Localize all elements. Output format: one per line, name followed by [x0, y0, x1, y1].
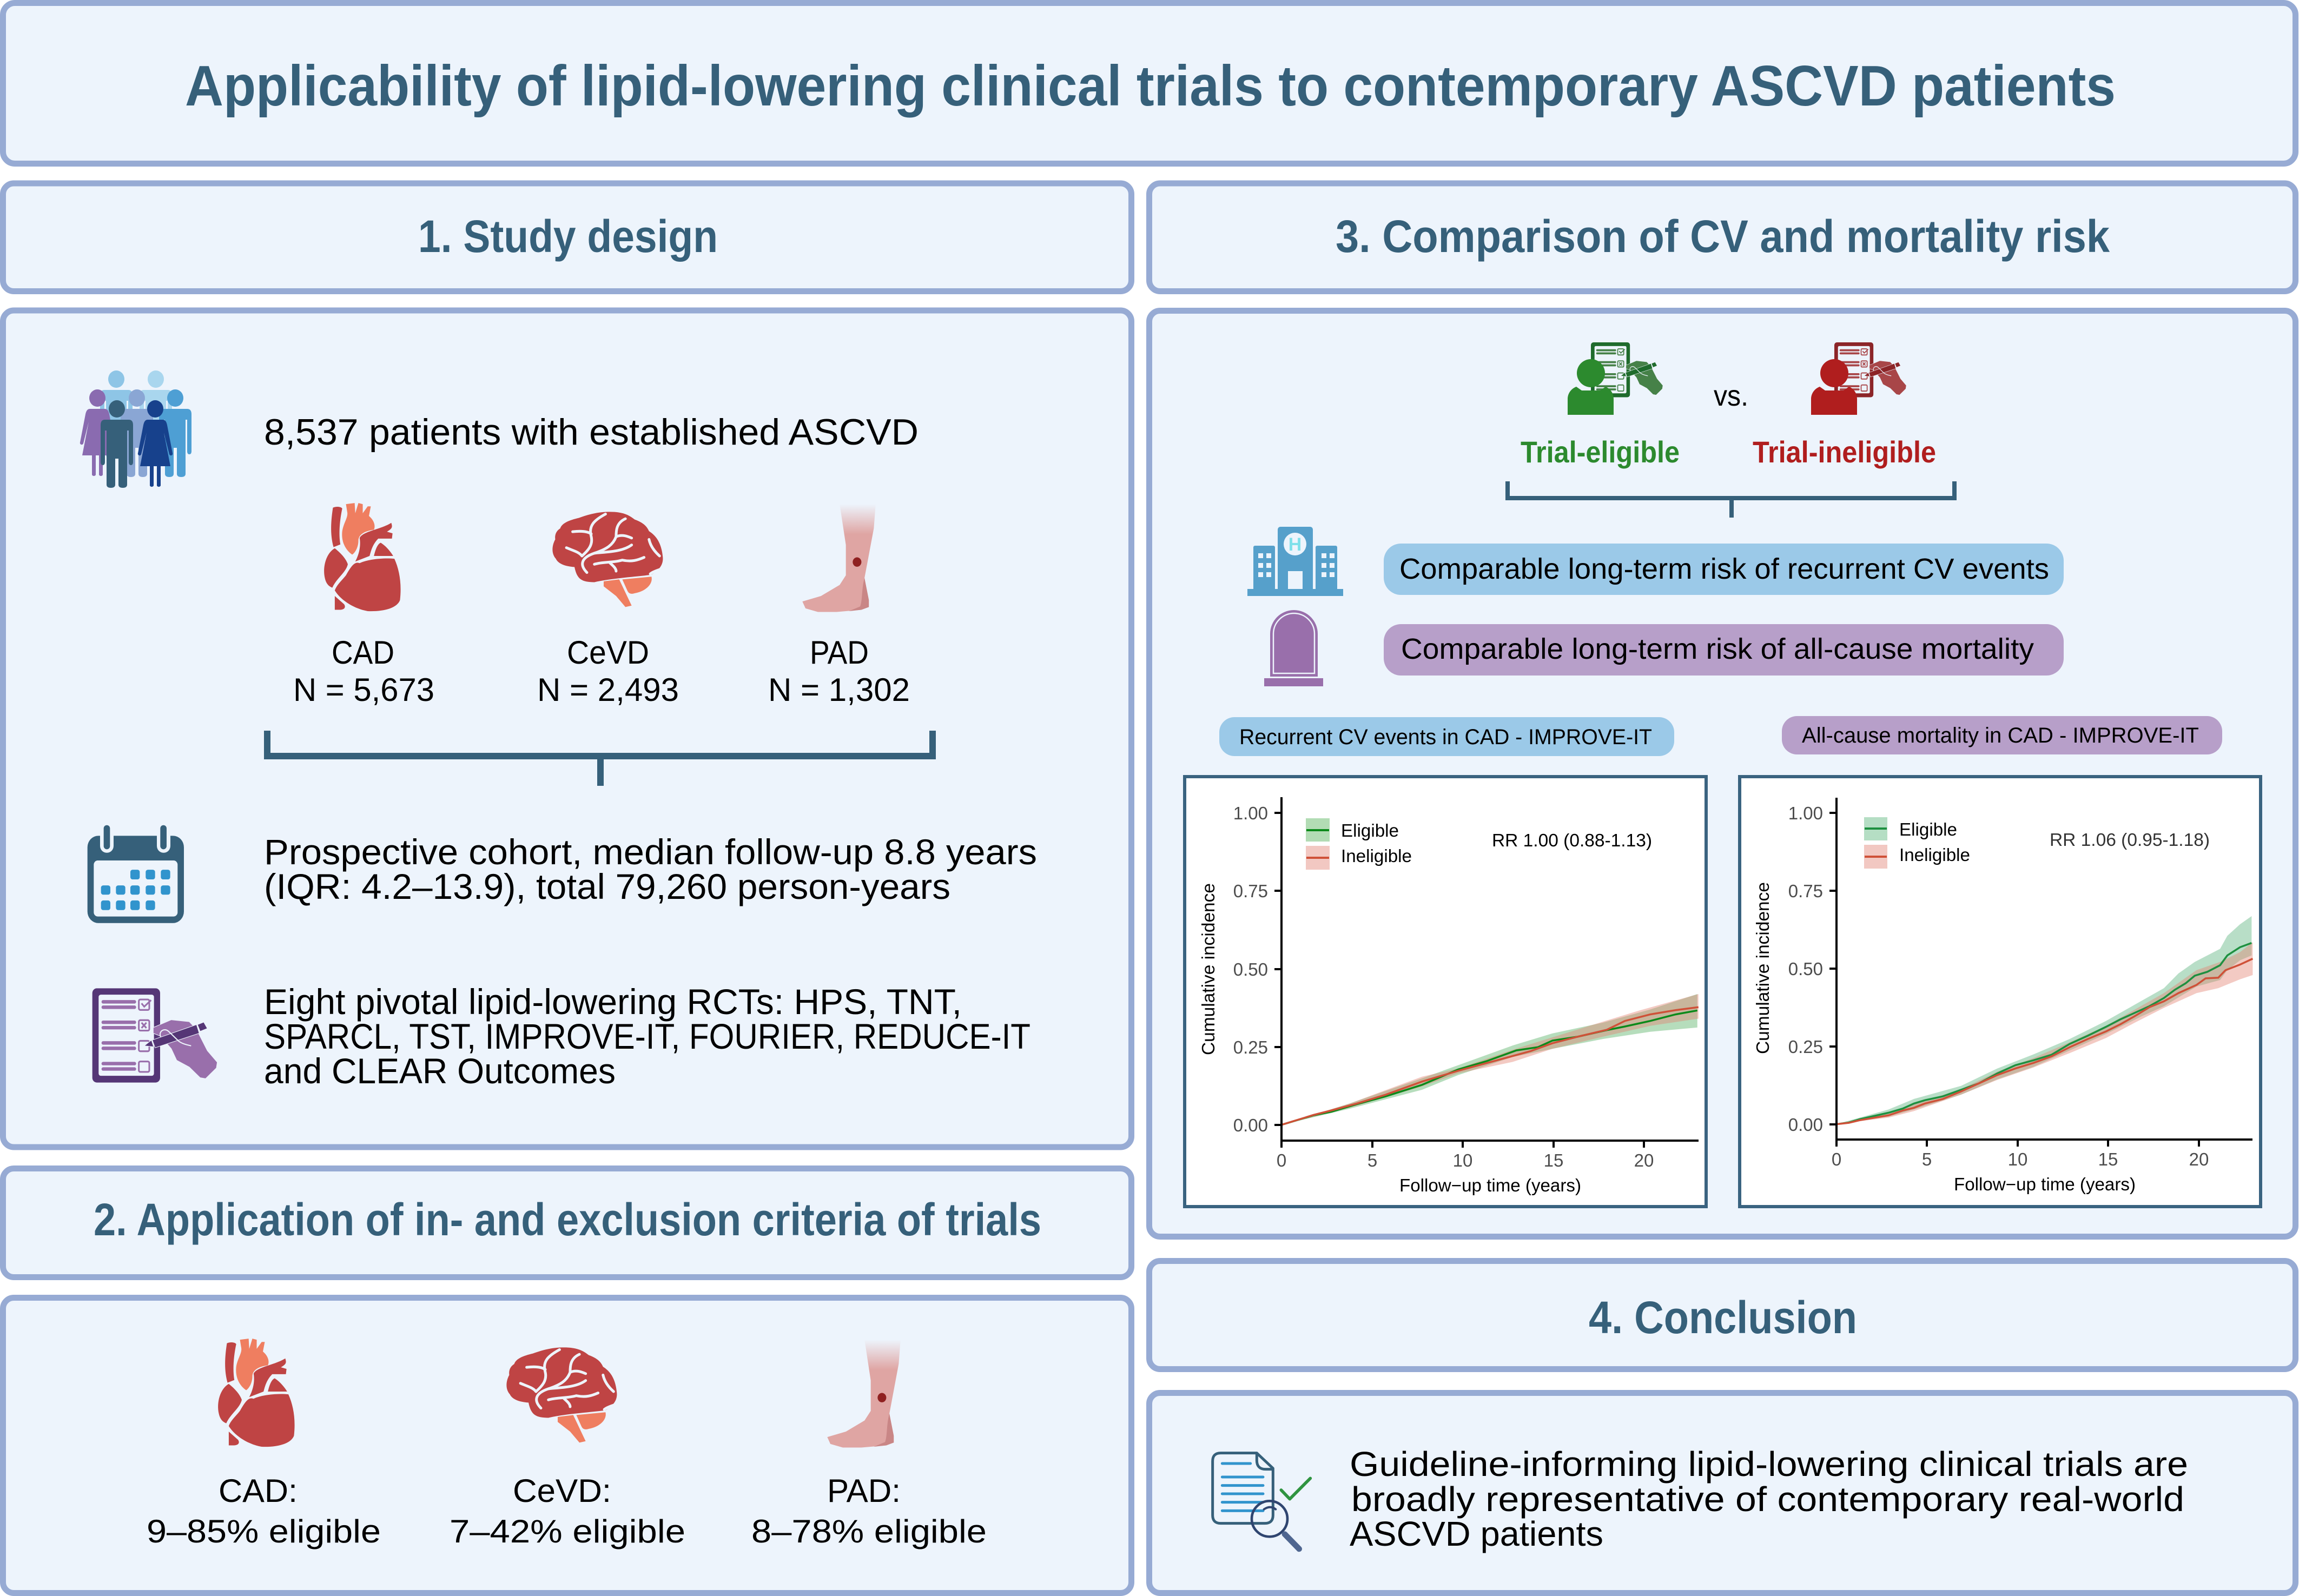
chart title: recurrent CV events: Recurrent CV events in CAD - IMPROVE-IT	[1239, 725, 1652, 749]
text: cohort follow-up	[264, 832, 1037, 906]
chart: recurrent CV events cumulative incidence: Cumulative incidence	[1198, 883, 1218, 1055]
chart: all-cause mortality cumulative incidence: Ineligible	[1899, 845, 1970, 865]
chart title: all-cause mortality: All-cause mortality in CAD - IMPROVE-IT	[1802, 724, 2199, 747]
icon: trial-ineligible person with checklist	[1811, 342, 1906, 415]
panel: study design	[3, 310, 1132, 1147]
callout: recurrent CV events	[1384, 544, 2064, 595]
text: cohort follow-up: (IQR: 4.2–13.9), total 79,260 person-years	[264, 866, 950, 906]
callout: recurrent CV events: Comparable long-term risk of recurrent CV events	[1399, 553, 2049, 585]
title banner	[3, 3, 2296, 163]
callout: all-cause mortality	[1384, 624, 2064, 676]
text: cohort follow-up: Prospective cohort, median follow-up 8.8 years	[264, 832, 1037, 872]
chart: recurrent CV events cumulative incidence: 1.00	[1233, 803, 1268, 823]
label: Trial-ineligible: Trial-ineligible	[1753, 435, 1936, 469]
chart: all-cause mortality cumulative incidence: 0.50	[1788, 959, 1823, 979]
icon: leg with ulcer	[802, 504, 876, 612]
label: PAD count: N = 1,302	[768, 672, 910, 708]
label: PAD eligibility: 8–78% eligible	[751, 1513, 987, 1549]
label: CeVD count	[537, 634, 679, 708]
chart: recurrent CV events cumulative incidence: Ineligible	[1341, 846, 1412, 866]
heading: 2. Application of criteria	[3, 1168, 1132, 1277]
heading: 1. Study design	[3, 183, 1132, 291]
chart: recurrent CV events cumulative incidence: Follow−up time (years)	[1399, 1175, 1581, 1195]
chart: recurrent CV events cumulative incidence: 0.00	[1233, 1115, 1268, 1135]
icon: calendar	[88, 825, 184, 923]
icon: hospital: H	[1289, 534, 1302, 555]
label: CAD eligibility: 9–85% eligible	[147, 1513, 381, 1549]
chart: all-cause mortality cumulative incidence: 0.75	[1788, 881, 1823, 901]
panel: eligibility per group	[3, 1298, 1132, 1593]
label: CAD eligibility	[147, 1473, 381, 1549]
icon: checklist purple	[93, 988, 217, 1083]
bracket: comparison	[1508, 481, 1954, 518]
chart: all-cause mortality cumulative incidence: RR 1.06 (0.95-1.18)	[2050, 830, 2210, 850]
heading: 2. Application of criteria: 2. Application of in- and exclusion criteria of trials	[94, 1194, 1041, 1245]
text: conclusion statement: ASCVD patients	[1350, 1514, 1603, 1553]
heading: 3. Comparison	[1149, 183, 2296, 291]
heading: 1. Study design: 1. Study design	[418, 211, 718, 262]
chart title: recurrent CV events	[1219, 717, 1674, 756]
chart: recurrent CV events cumulative incidence: 0.50	[1233, 959, 1268, 979]
chart: recurrent CV events cumulative incidence	[1185, 777, 1706, 1207]
label: PAD eligibility	[751, 1473, 987, 1549]
icon: hospital	[1247, 527, 1343, 596]
heading: 4. Conclusion	[1149, 1261, 2296, 1369]
chart: all-cause mortality cumulative incidence: Eligible	[1899, 819, 1957, 839]
chart: all-cause mortality cumulative incidence	[1740, 777, 2261, 1207]
icon: document with magnifier and check	[1213, 1453, 1310, 1549]
chart: recurrent CV events cumulative incidence: 5	[1367, 1150, 1377, 1170]
text: patient count: 8,537 patients with established ASCVD	[264, 412, 919, 453]
chart: all-cause mortality cumulative incidence: 5	[1922, 1149, 1932, 1169]
chart: recurrent CV events cumulative incidence: 20	[1634, 1150, 1654, 1170]
chart: all-cause mortality cumulative incidence: 20	[2189, 1149, 2209, 1169]
label: PAD count	[768, 634, 910, 708]
label: CeVD count: CeVD	[567, 634, 649, 671]
chart: all-cause mortality cumulative incidence: 15	[2098, 1149, 2118, 1169]
panel: comparison of risk	[1149, 310, 2296, 1236]
icon: brain	[506, 1347, 617, 1442]
title text: Applicability of lipid-lowering clinical trials to contemporary ASCVD patients	[185, 54, 2116, 118]
label: CAD count: CAD	[332, 634, 394, 671]
panel: conclusion	[1149, 1393, 2296, 1593]
label: PAD eligibility: PAD:	[827, 1473, 901, 1509]
text: eight pivotal trials: and CLEAR Outcomes	[264, 1051, 616, 1091]
callout: all-cause mortality: Comparable long-term risk of all-cause mortality	[1401, 633, 2034, 665]
chart title: all-cause mortality	[1782, 716, 2222, 754]
label: CeVD eligibility: 7–42% eligible	[450, 1513, 685, 1549]
chart: recurrent CV events cumulative incidence: 15	[1544, 1150, 1563, 1170]
chart: all-cause mortality cumulative incidence: 0	[1832, 1149, 1841, 1169]
chart: recurrent CV events cumulative incidence: 10	[1453, 1150, 1472, 1170]
text: vs.: vs.	[1714, 380, 1748, 412]
text: conclusion statement: Guideline-informing lipid-lowering clinical trials are	[1350, 1445, 2188, 1484]
label: CeVD eligibility	[450, 1473, 685, 1549]
chart: all-cause mortality cumulative incidence: 1.00	[1788, 803, 1823, 823]
text: conclusion statement	[1350, 1445, 2188, 1553]
chart: all-cause mortality cumulative incidence: Cumulative incidence	[1753, 882, 1773, 1054]
icon: tombstone	[1264, 610, 1323, 686]
icon: leg with ulcer	[827, 1340, 901, 1448]
text: conclusion statement: broadly representative of contemporary real-world	[1351, 1480, 2184, 1519]
label: CeVD eligibility: CeVD:	[513, 1473, 611, 1509]
chart: all-cause mortality cumulative incidence: Follow−up time (years)	[1954, 1174, 2136, 1194]
heading: 3. Comparison: 3. Comparison of CV and mortality risk	[1336, 211, 2110, 262]
chart: recurrent CV events cumulative incidence: 0.25	[1233, 1037, 1268, 1057]
text: eight pivotal trials: Eight pivotal lipid-lowering RCTs: HPS, TNT,	[264, 982, 962, 1022]
label: CAD eligibility: CAD:	[219, 1473, 298, 1509]
icon: heart	[218, 1339, 295, 1447]
icon: heart	[324, 503, 401, 611]
label: CAD count	[293, 634, 434, 708]
chart: recurrent CV events cumulative incidence: 0	[1277, 1150, 1286, 1170]
chart: recurrent CV events cumulative incidence: RR 1.00 (0.88-1.13)	[1492, 830, 1652, 850]
label: CeVD count: N = 2,493	[537, 672, 679, 708]
chart: all-cause mortality cumulative incidence: 0.00	[1788, 1115, 1823, 1135]
text: eight pivotal trials	[264, 982, 1030, 1091]
text: eight pivotal trials: SPARCL, TST, IMPROVE-IT, FOURIER, REDUCE-IT	[264, 1016, 1030, 1056]
heading: 4. Conclusion: 4. Conclusion	[1589, 1292, 1857, 1343]
icon: group of patients	[80, 370, 191, 488]
chart: all-cause mortality cumulative incidence: 10	[2008, 1149, 2027, 1169]
icon: brain	[552, 512, 663, 607]
icon: trial-eligible person with checklist	[1568, 342, 1663, 415]
chart: recurrent CV events cumulative incidence: Eligible	[1341, 820, 1399, 840]
chart: recurrent CV events cumulative incidence: 0.75	[1233, 881, 1268, 901]
chart: all-cause mortality cumulative incidence: 0.25	[1788, 1037, 1823, 1057]
label: CAD count: N = 5,673	[293, 672, 434, 708]
label: Trial-eligible: Trial-eligible	[1521, 435, 1680, 469]
bracket: subgroups combine	[267, 731, 933, 786]
label: PAD count: PAD	[810, 634, 869, 671]
